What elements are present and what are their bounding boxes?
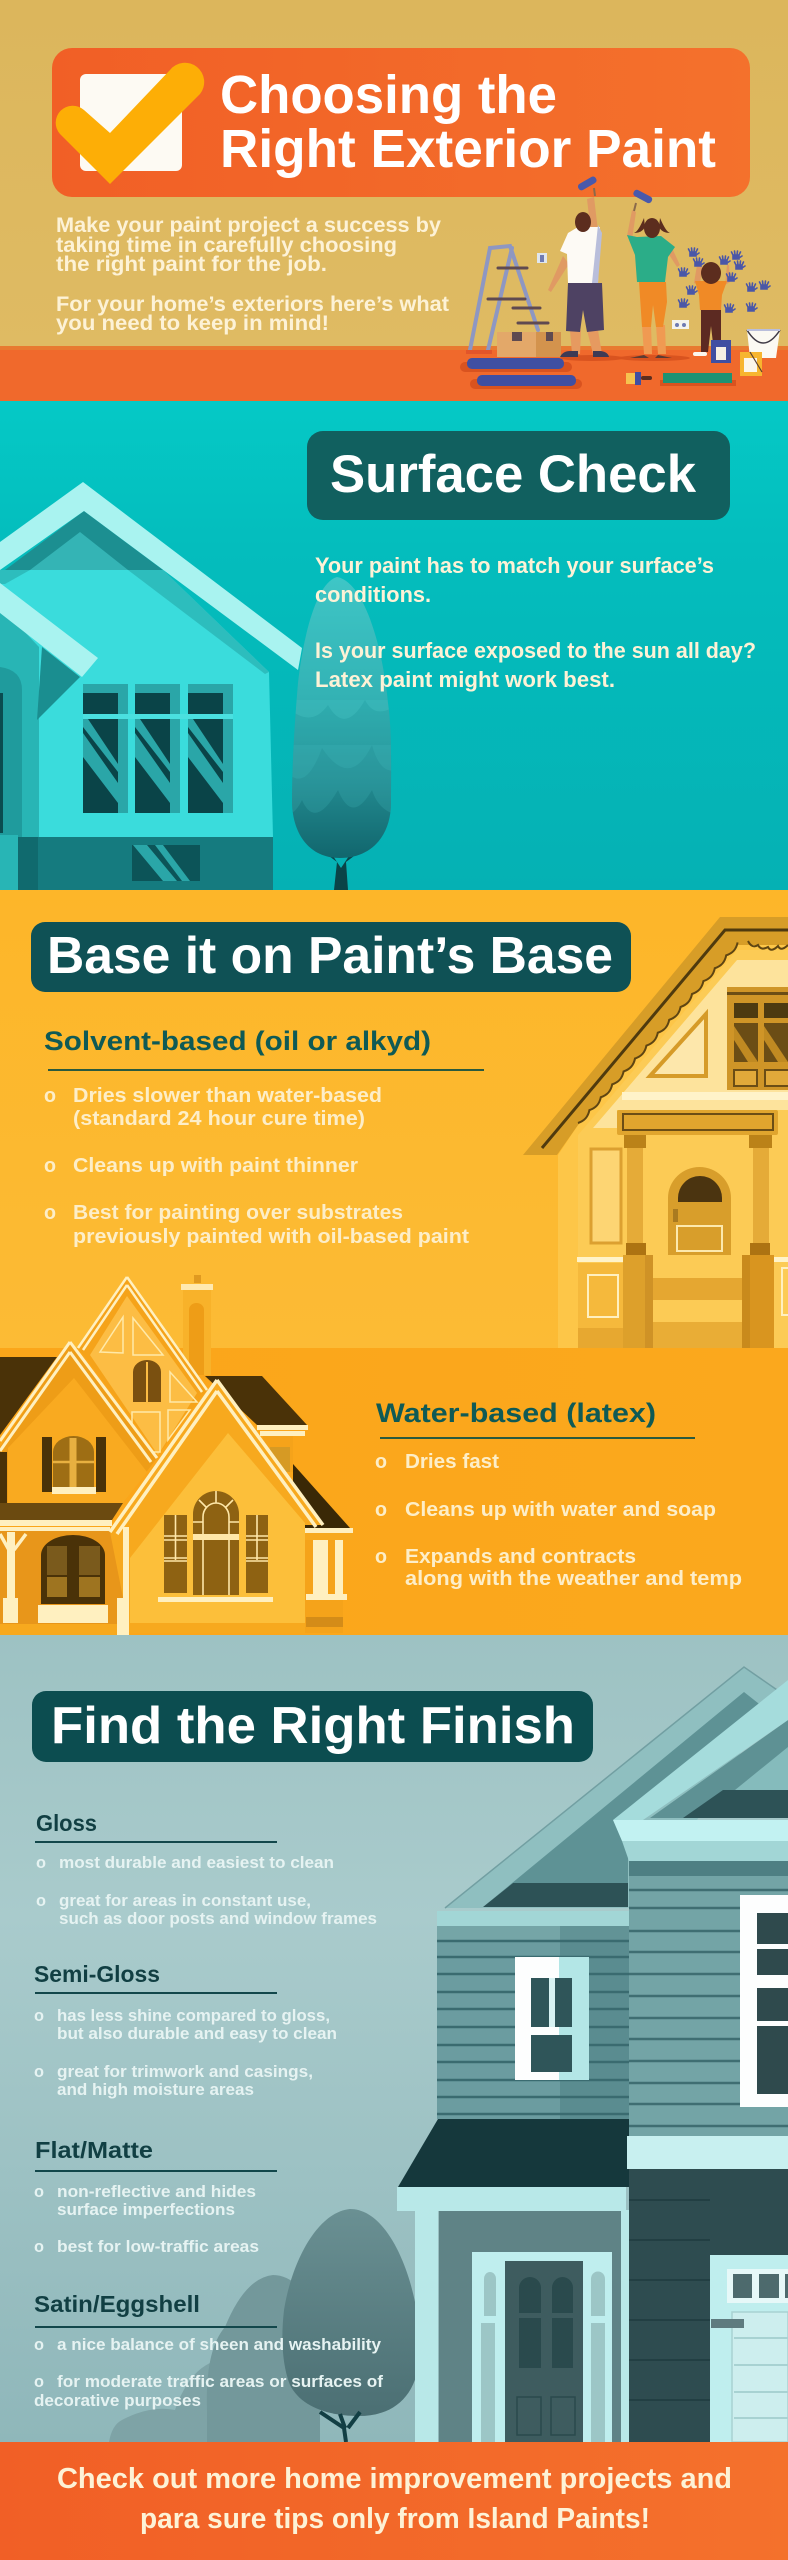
back roof [445, 1667, 780, 1908]
intro text [56, 214, 449, 335]
text: water-based list: o [375, 1546, 387, 1568]
illustration: grey-blue house [397, 1667, 788, 2442]
intro text: the right paint for the job. [56, 253, 327, 276]
icon: paint cans [711, 340, 762, 376]
left wing wall [0, 606, 39, 837]
text: surface check body [315, 553, 756, 692]
text: water-based list [375, 1398, 742, 1590]
basement window [132, 845, 207, 881]
text: water-based list: o [375, 1451, 387, 1473]
panel: surface check heading [307, 431, 730, 520]
chimney [181, 1275, 213, 1375]
text block: semi-gloss: o [34, 2062, 44, 2081]
back gable [78, 1277, 207, 1455]
porch [577, 1110, 788, 1348]
arched window [42, 1436, 106, 1494]
footer banner: Check out more home improvement projects and [57, 2463, 732, 2495]
porch [0, 1503, 128, 1635]
text: water-based list: Dries fast [405, 1451, 499, 1473]
text block: satin eggshell: for moderate traffic areas or surfaces of [57, 2372, 383, 2391]
front windows [158, 1491, 273, 1602]
icon: teal tree [292, 577, 392, 890]
illustration: yellow house lower left [0, 1275, 353, 1635]
text block: satin eggshell: decorative purposes [34, 2391, 201, 2410]
outlets [537, 253, 689, 329]
section: base background [0, 890, 788, 1635]
text block: semi-gloss: but also durable and easy to clean [57, 2024, 337, 2043]
text: water-based list: Expands and contracts [405, 1546, 636, 1568]
large window [740, 1895, 788, 2107]
intro text: taking time in carefully choosing [56, 234, 397, 257]
illustration: trees [109, 2209, 420, 2442]
text block: gloss: o [36, 1891, 46, 1910]
illustration: yellow house upper right [523, 917, 788, 1348]
footer banner: para sure tips only from Island Paints! [140, 2503, 650, 2535]
garage [710, 2255, 788, 2442]
text: solvent-based list [44, 1026, 484, 1248]
gable triangle [650, 1014, 706, 1076]
pale gable wall [593, 960, 788, 1128]
title text [220, 65, 716, 179]
upper gable [5, 511, 163, 570]
house wall [558, 945, 788, 1348]
text block: semi-gloss: o [34, 2006, 44, 2025]
text block: gloss: great for areas in constant use, [59, 1891, 311, 1910]
right annex [305, 1528, 353, 1633]
intro text: you need to keep in mind! [56, 312, 329, 335]
icon: ladder [466, 246, 548, 354]
text: water-based list: o [375, 1499, 387, 1521]
text: surface check body: Is your surface exposed to the sun all day? [315, 638, 756, 663]
text block: semi-gloss: Semi-Gloss [34, 1961, 160, 1987]
text block: semi-gloss: and high moisture areas [57, 2080, 254, 2099]
text block: semi-gloss [34, 1961, 337, 2099]
dark triangle under lower gable [37, 647, 80, 720]
text block: satin eggshell: o [34, 2372, 44, 2391]
text block: satin eggshell [34, 2291, 383, 2410]
front door [472, 2252, 612, 2442]
text: solvent-based list: Dries slower than water-based [73, 1085, 382, 1107]
crown [292, 577, 392, 858]
intro text: Make your paint project a success by [56, 214, 441, 237]
text: solvent-based list: Solvent-based (oil or alkyd) [44, 1026, 431, 1056]
side panel [591, 1149, 621, 1243]
text: solvent-based list: (standard 24 hour cure time) [73, 1108, 365, 1130]
section: header background [0, 0, 788, 401]
text block: semi-gloss: great for trimwork and casings, [57, 2062, 313, 2081]
text: solvent-based list: o [44, 1085, 56, 1107]
text: solvent-based list: Best for painting over substrates [73, 1202, 403, 1224]
porch wall [397, 2187, 629, 2442]
trunk [329, 856, 354, 890]
intro text: For your home’s exteriors here’s what [56, 293, 449, 316]
text: surface check body: conditions. [315, 582, 431, 607]
dark roofs [0, 1357, 350, 1528]
text block: flat matte: o [34, 2182, 44, 2201]
icon: blue handprints [678, 248, 770, 312]
text block: flat matte: best for low-traffic areas [57, 2237, 259, 2256]
columns [627, 1148, 643, 1243]
porch roof [398, 2119, 629, 2187]
text: solvent-based list: Cleans up with paint thinner [73, 1155, 358, 1177]
title banner [52, 48, 750, 197]
text: surface check body: Latex paint might work best. [315, 667, 615, 692]
text block: gloss: most durable and easiest to clean [59, 1853, 334, 1872]
text block: flat matte: non-reflective and hides [57, 2182, 256, 2201]
roof shadow band [128, 570, 269, 674]
footer banner [0, 2442, 788, 2560]
lower gable trim [0, 583, 98, 677]
icon: green roller tray [660, 373, 736, 386]
right gable [650, 1720, 788, 1818]
text: solvent-based list: o [44, 1202, 56, 1224]
small window [515, 1957, 589, 2080]
section: finish background [0, 1635, 788, 2442]
figure: child [693, 262, 730, 356]
left gable [0, 1342, 157, 1503]
panel: finish heading: Find the Right Finish [51, 1697, 575, 1755]
text: solvent-based list: previously painted with oil-based paint [73, 1226, 469, 1248]
illustration: family painting [460, 175, 780, 389]
door [668, 1167, 731, 1255]
text block: satin eggshell: a nice balance of sheen and washability [57, 2335, 382, 2354]
text block: gloss: such as door posts and window frames [59, 1909, 377, 1928]
text block: semi-gloss: has less shine compared to gloss, [57, 2006, 330, 2025]
icon: white paint bucket [747, 330, 780, 358]
scalloped trim [578, 941, 788, 1123]
text block: satin eggshell: Satin/Eggshell [34, 2291, 200, 2317]
title text: Choosing the [220, 65, 557, 125]
house body [0, 570, 273, 890]
text: water-based list: Water-based (latex) [376, 1398, 656, 1428]
upper window [727, 987, 788, 1090]
roof trim [0, 482, 302, 670]
text block: gloss: o [36, 1853, 46, 1872]
text block: flat matte: o [34, 2237, 44, 2256]
icon: checkbox with check mark [56, 63, 204, 184]
text: water-based list: along with the weather and temp [405, 1568, 742, 1590]
text block: gloss [35, 1810, 377, 1928]
left wall with siding [437, 1911, 629, 2119]
icon: cardboard box [497, 332, 561, 357]
front gable body [110, 1380, 323, 1635]
panel: base heading: Base it on Paint’s Base [47, 927, 613, 985]
right lower wall [627, 2136, 788, 2442]
text block: satin eggshell: o [34, 2335, 44, 2354]
text block: flat matte [34, 2137, 277, 2256]
figure: woman with roller [618, 189, 690, 361]
text: surface check body: Your paint has to match your surface’s [315, 553, 714, 578]
main wall with siding [613, 1820, 788, 2136]
text block: gloss: Gloss [36, 1810, 97, 1836]
icon: rolled tarps [460, 358, 582, 389]
fascia band [622, 1092, 788, 1100]
panel: surface check heading: Surface Check [330, 445, 697, 504]
text: solvent-based list: o [44, 1155, 56, 1177]
base band [18, 837, 273, 890]
illustration: teal house [0, 482, 302, 890]
text block: flat matte: Flat/Matte [35, 2137, 153, 2163]
window bank [83, 684, 233, 813]
text: water-based list: Cleans up with water and soap [405, 1499, 716, 1521]
text block: flat matte: surface imperfections [57, 2200, 235, 2219]
roof band [523, 917, 788, 1155]
icon: paint brush [626, 372, 652, 385]
figure: man with roller [548, 175, 624, 361]
title text: Right Exterior Paint [220, 119, 716, 179]
section: surface check background [0, 401, 788, 890]
